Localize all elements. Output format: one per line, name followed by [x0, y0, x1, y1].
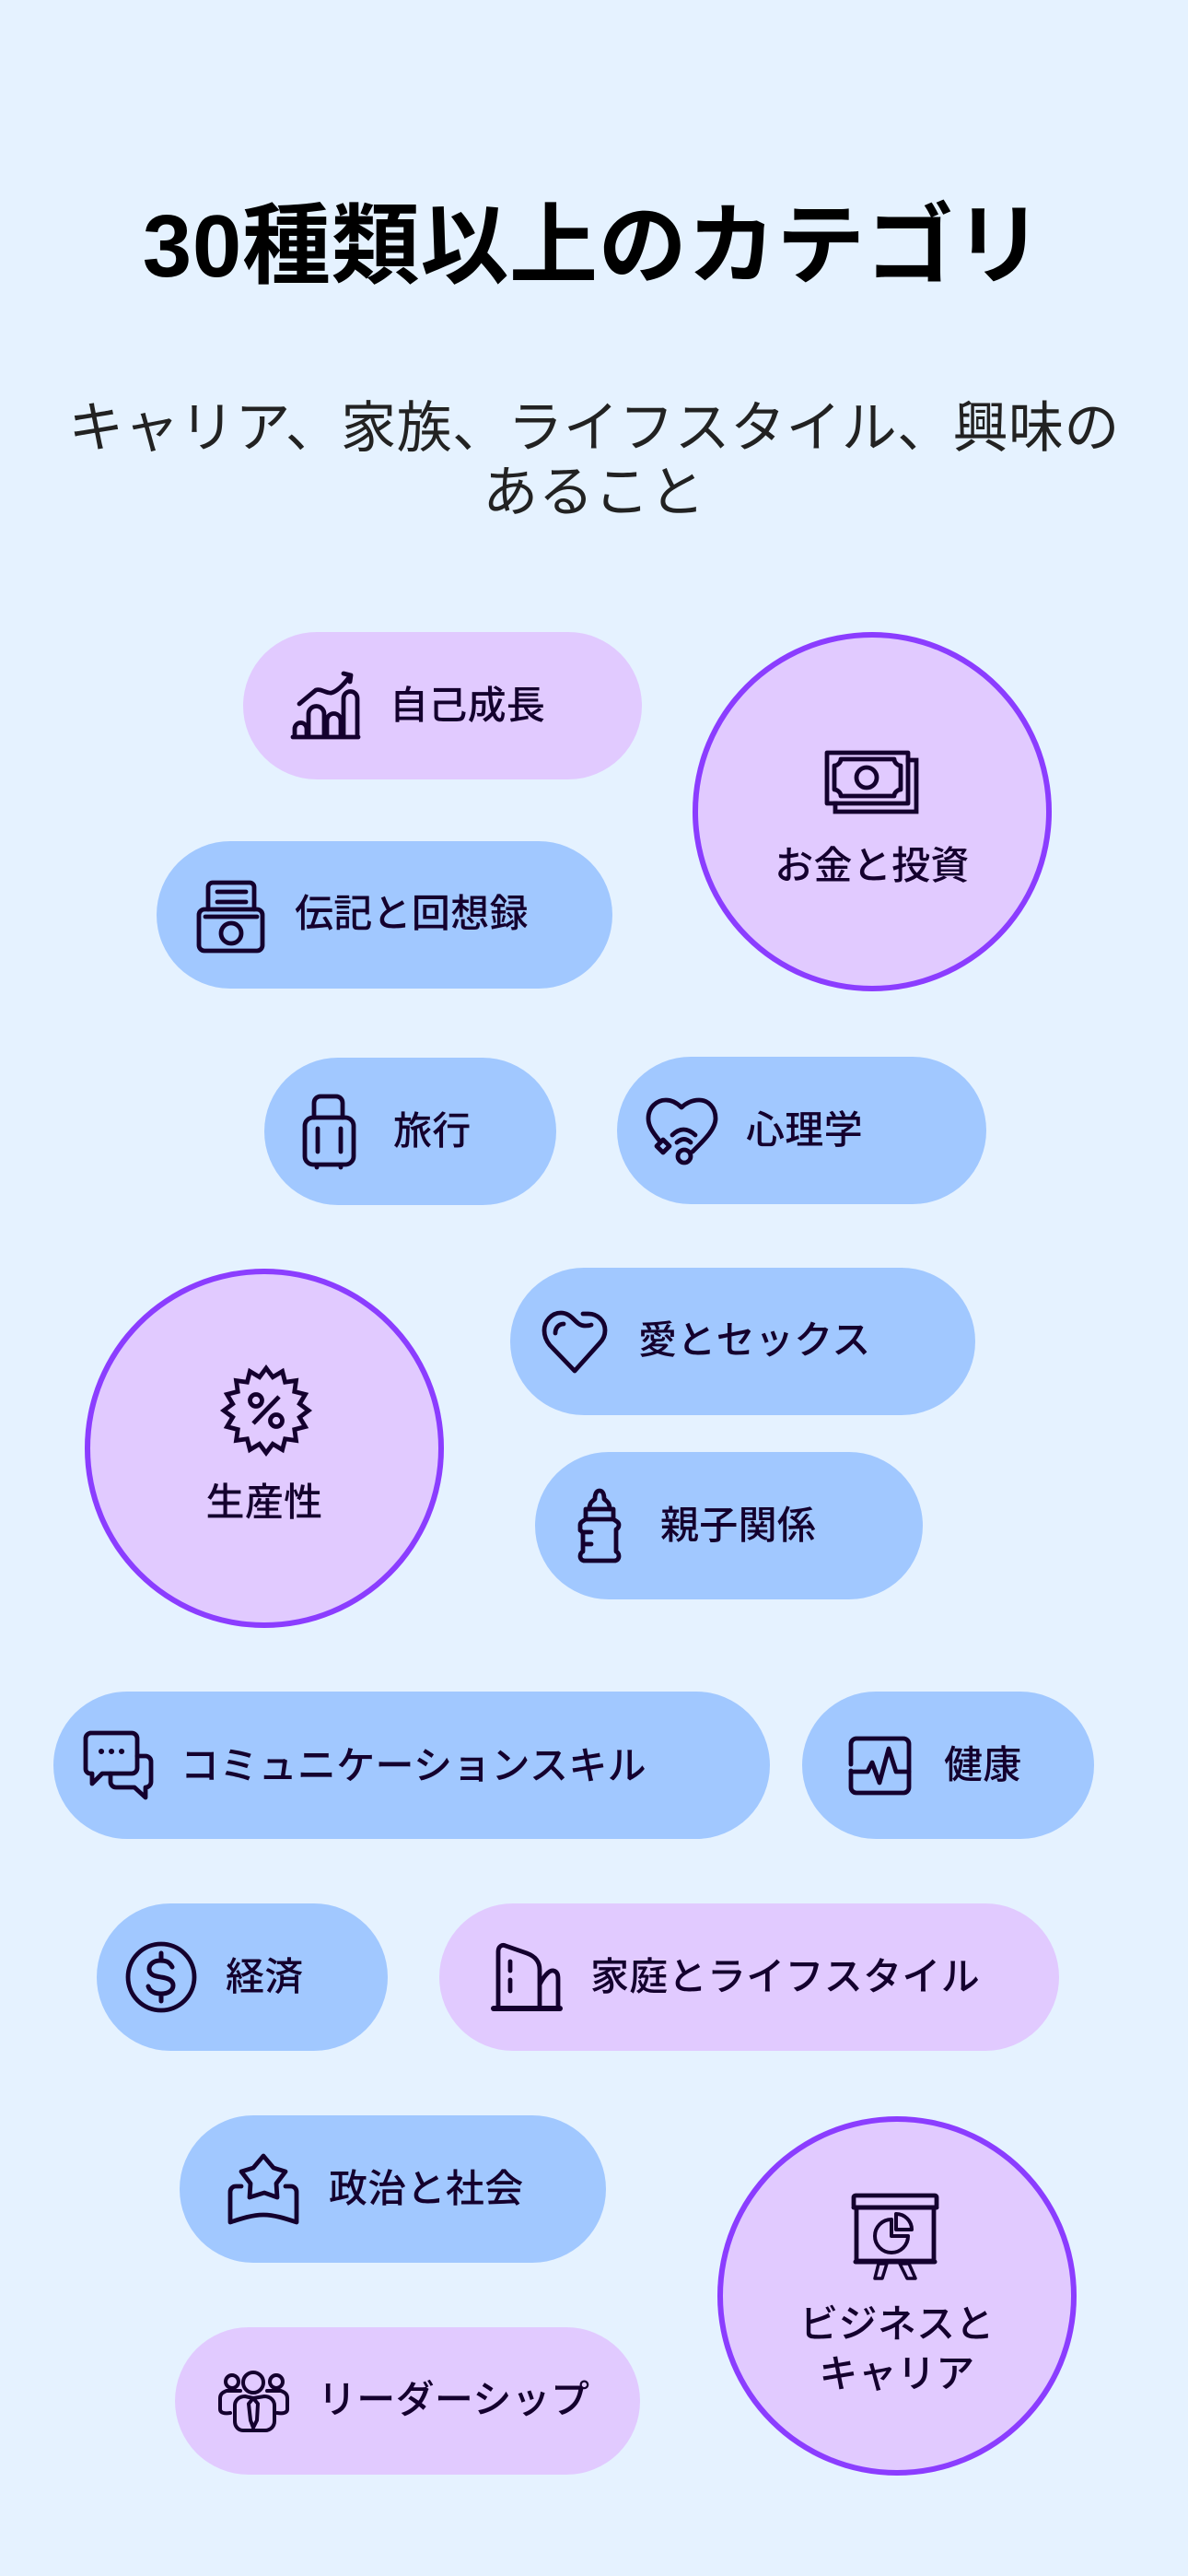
icon: heart stethoscope	[646, 1098, 718, 1165]
label: 伝記と回想録	[295, 892, 529, 935]
label: 政治と社会	[329, 2167, 524, 2210]
label: 家庭とライフスタイル	[590, 1955, 980, 1998]
icon: baby bottle	[578, 1489, 621, 1563]
pill: 心理学	[617, 1057, 986, 1204]
pill: コミュニケーションスキル	[53, 1692, 770, 1839]
label: 旅行	[393, 1109, 472, 1153]
pill: 政治と社会	[180, 2115, 606, 2263]
pill: 親子関係	[535, 1452, 923, 1599]
pill: 自己成長	[243, 632, 642, 779]
label	[799, 2302, 995, 2395]
label: 健康	[944, 1743, 1022, 1786]
icon: star book	[228, 2154, 298, 2224]
label: ビジネスと	[799, 2302, 995, 2346]
icon: buildings	[491, 1942, 563, 2011]
label: 親子関係	[660, 1504, 816, 1547]
pill: リーダーシップ	[175, 2327, 640, 2475]
pill: 愛とセックス	[510, 1268, 975, 1415]
label: お金と投資	[775, 844, 970, 887]
pill: 伝記と回想録	[157, 841, 612, 989]
icon: heart	[542, 1310, 608, 1373]
icon: team of people	[218, 2371, 289, 2432]
label: キャリア	[819, 2352, 975, 2395]
title: 30種類以上のカテゴリ	[143, 197, 1043, 296]
label: 愛とセックス	[638, 1318, 871, 1362]
icon: growth chart	[291, 671, 361, 739]
icon: percent badge	[220, 1364, 312, 1457]
label: コミュニケーションスキル	[181, 1744, 646, 1787]
subtitle: あること	[483, 462, 705, 523]
circle: 生産性	[85, 1269, 444, 1628]
pill: 健康	[802, 1692, 1094, 1839]
pill: 旅行	[264, 1058, 556, 1205]
pill: 家庭とライフスタイル	[439, 1903, 1059, 2051]
icon: presentation board	[851, 2193, 939, 2280]
label: リーダーシップ	[318, 2378, 589, 2421]
pill: 経済	[97, 1903, 388, 2051]
circle: お金と投資	[693, 632, 1052, 991]
icon: banknotes	[825, 750, 919, 814]
icon: pulse monitor	[849, 1736, 912, 1795]
circle: ビジネスとキャリア	[717, 2116, 1077, 2476]
subtitle	[68, 397, 1120, 523]
icon: suitcase	[302, 1095, 355, 1170]
icon: dollar coin	[125, 1942, 197, 2012]
label: 生産性	[206, 1481, 322, 1524]
label: 経済	[226, 1955, 304, 1998]
icon: printer memoir	[197, 881, 265, 953]
subtitle: キャリア、家族、ライフスタイル、興味の	[68, 397, 1120, 459]
label: 心理学	[746, 1108, 863, 1152]
label: 自己成長	[390, 684, 545, 727]
icon: chat bubbles	[83, 1730, 153, 1800]
